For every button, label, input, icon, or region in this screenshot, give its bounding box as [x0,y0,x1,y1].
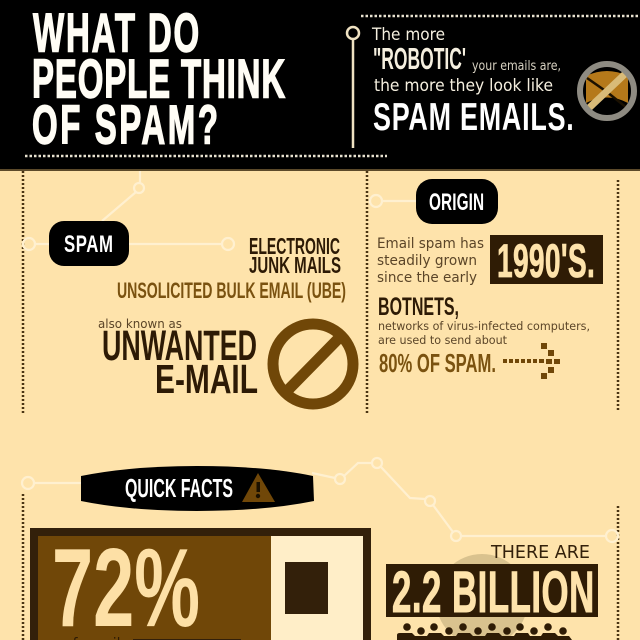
spam pill [49,221,129,266]
legend square [285,562,328,614]
unwanted e-mail [102,322,258,402]
unwanted e-mail: E-MAIL [155,356,258,402]
botnets description: networks of virus-infected computers, [378,319,590,333]
icon: crossed-out envelope [580,64,634,118]
title: OF SPAM? [32,94,218,156]
spam pill: SPAM [64,231,113,258]
electronic junk mails: JUNK MAILS [249,252,341,278]
there are: THERE ARE [490,542,590,563]
origin pill [416,179,498,224]
panel: origin [370,179,603,379]
80 percent of spam: 80% OF SPAM. [379,348,496,378]
email spam text [377,236,484,286]
robotic emails text: the more they look like [374,76,553,96]
botnets description [378,319,590,347]
botnets: BOTNETS, [378,293,459,321]
connector line chart [22,458,618,542]
tan circle behind billion [436,554,528,640]
robotic emails text: The more [371,25,445,45]
title [32,2,285,156]
connector lines [23,171,234,250]
quick facts pill [81,466,314,511]
panel: spam [23,171,353,404]
panel: black header [0,0,640,171]
unsolicited bulk email: UNSOLICITED BULK EMAIL (UBE) [117,278,346,303]
icon: warning triangle [242,473,275,502]
unwanted e-mail: UNWANTED [102,322,257,370]
origin connector [370,195,417,207]
title: PEOPLE THINK [32,48,285,110]
also known as: also known as [98,316,182,331]
origin pill: ORIGIN [429,190,484,216]
icon: dotted arrow [503,343,560,379]
2.2 billion box: 2.2 BILLION [392,561,594,625]
dotted divider left [25,155,387,157]
quick facts pill: QUICK FACTS [125,473,233,503]
email spam text: steadily grown [377,253,477,269]
robotic emails text: SPAM EMAILS. [373,96,574,139]
electronic junk mails: ELECTRONIC [249,233,340,259]
1990s box: 1990'S. [497,236,595,288]
panel: quick facts [22,458,618,640]
timeline marker [347,27,359,148]
robotic emails text: your emails are, [472,59,561,74]
robotic emails text [371,25,574,139]
email spam text: since the early [377,270,477,286]
dotted divider right [361,15,640,17]
email spam text: Email spam has [377,236,484,252]
72 percent stat box [30,526,371,640]
title: WHAT DO [33,2,199,64]
botnets description: are used to send about [378,333,507,347]
icon: prohibition sign [273,324,353,404]
dotted column rules [23,171,618,640]
icon: row of people [397,623,572,640]
electronic junk mails [249,233,341,278]
robotic emails text: "ROBOTIC' [373,41,466,76]
